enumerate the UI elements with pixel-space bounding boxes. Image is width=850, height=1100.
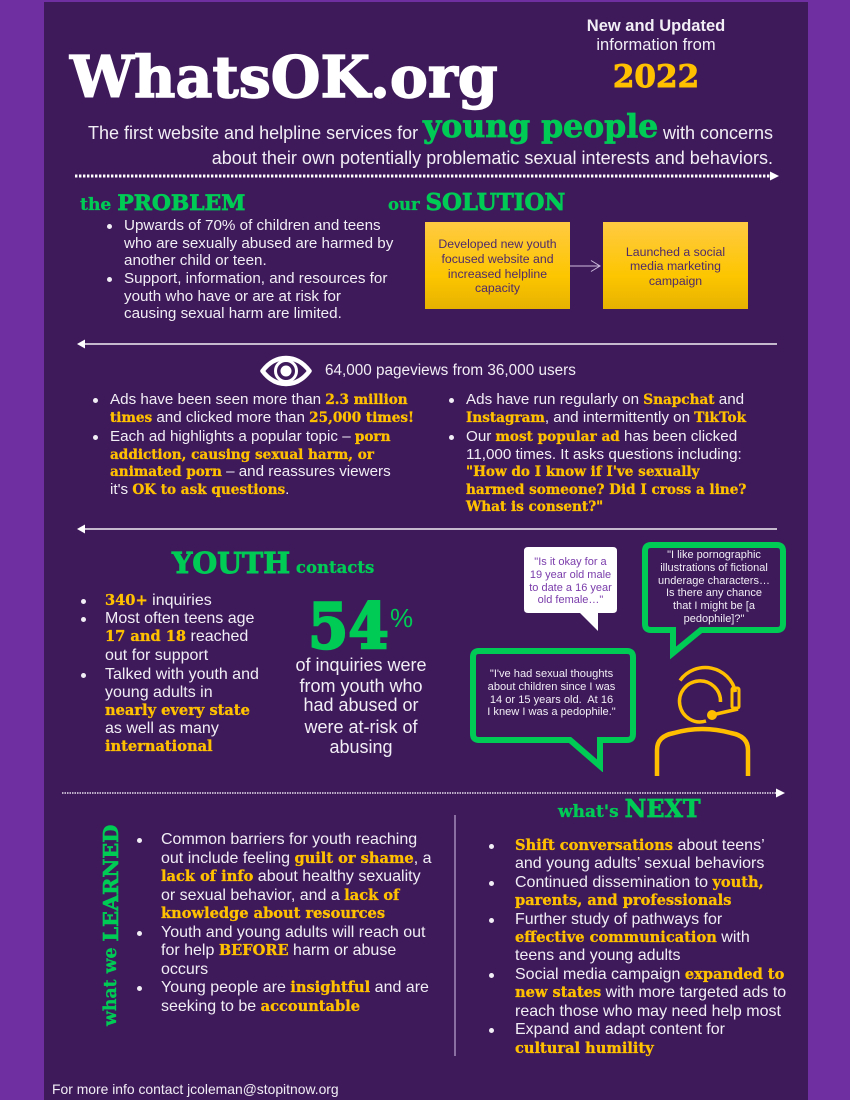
update note: information from [596, 36, 716, 54]
next bullets: teens and young adults [515, 947, 680, 964]
youth bullets: nearly every state [105, 702, 250, 719]
solution box: website: Developed new youth [438, 237, 557, 251]
ads results left column: it's OK to ask questions. [110, 481, 289, 498]
learned bullets: lack of info about healthy sexuality [161, 868, 421, 885]
divider arrow [77, 340, 777, 348]
learned bullets: seeking to be accountable [161, 998, 360, 1015]
ads results left column: times and clicked more than 25,000 times! [110, 409, 414, 426]
next bullets: Continued dissemination to youth, [515, 874, 764, 891]
update note [587, 17, 725, 95]
speech bubble: illustrations question: illustrations of fictional [660, 562, 768, 574]
learned bullets [137, 831, 432, 1015]
speech bubble: illustrations question [642, 542, 786, 660]
learned bullets: Common barriers for youth reaching [161, 831, 417, 848]
speech bubble: dating question: "Is it okay for a [534, 556, 607, 568]
learned bullets: out include feeling guilt or shame, a [161, 850, 431, 866]
pageviews stat [260, 356, 576, 386]
problem bullets [107, 217, 394, 322]
learned bullets: Young people are insightful and are [161, 979, 429, 996]
pageviews stat: 64,000 pageviews from 36,000 users [325, 362, 576, 379]
solution box: website [425, 222, 570, 309]
subtitle: The first website and helpline services for [88, 123, 418, 143]
youth bullets: 17 and 18 reached [105, 628, 248, 645]
ads results right column: Our most popular ad has been clicked [466, 428, 737, 445]
panel: youth contacts [81, 546, 427, 757]
icon: eye [260, 356, 312, 386]
subtitle: young people [423, 108, 658, 145]
ads results left column: animated porn – and reassures viewers [110, 463, 391, 480]
update note: New and Updated [587, 17, 725, 35]
youth bullets: out for support [105, 647, 208, 664]
ads results right column [449, 391, 746, 515]
title: WhatsOK.org [70, 44, 498, 111]
youth bullets: young adults in [105, 684, 213, 701]
ads results right column: Instagram, and intermittently on TikTok [466, 409, 746, 426]
problem bullets: Support, information, and resources for [124, 270, 387, 287]
next bullets: cultural humility [515, 1040, 654, 1057]
heading: our solution: our SOLUTION [388, 189, 565, 216]
solution box: website: increased helpline [448, 266, 547, 280]
solution box: website: capacity [475, 281, 520, 295]
stat: 54 percent [295, 589, 427, 757]
youth bullets: Most often teens age [105, 610, 254, 627]
youth bullets: 340+ inquiries [105, 592, 212, 609]
next bullets: effective communication with [515, 929, 750, 946]
divider: vertical [454, 815, 456, 1056]
youth bullets: Talked with youth and [105, 666, 259, 683]
youth bullets [81, 592, 259, 755]
divider arrow [77, 524, 777, 534]
ads results right column: 11,000 times. It asks questions including: [466, 446, 742, 462]
subtitle: with concerns [663, 123, 773, 143]
subtitle: about their own potentially problematic sexual interests and behaviors. [212, 148, 773, 168]
heading: youth contacts: YOUTH contacts [172, 546, 374, 580]
speech bubble: illustrations question: Is there any chance [666, 587, 762, 599]
footer contact: For more info contact jcoleman@stopitnow.org [52, 1081, 339, 1097]
next bullets: Social media campaign expanded to [515, 966, 784, 983]
heading: what we learned: what we LEARNED [98, 825, 123, 1026]
speech bubble: illustrations question: that I might be [a [673, 600, 755, 612]
next bullets: new states with more targeted ads to [515, 984, 786, 1001]
ads results left column: Each ad highlights a popular topic – porn [110, 428, 390, 445]
stat: 54 percent: had abused or [303, 695, 419, 715]
next bullets: and young adults’ sexual behaviors [515, 855, 764, 872]
speech bubble: illustrations question: "I like pornographic [667, 549, 761, 561]
youth bullets: as well as many [105, 720, 219, 737]
next bullets: parents, and professionals [515, 892, 731, 909]
speech bubble: dating question: to date a 16 year [529, 582, 612, 594]
solution box: campaign [603, 222, 748, 309]
youth bullets: international [105, 738, 213, 755]
solution box: campaign: campaign [649, 274, 702, 288]
stat: 54 percent: abusing [329, 737, 393, 757]
next bullets: Expand and adapt content for [515, 1021, 725, 1038]
solution box: campaign: Launched a social [626, 245, 725, 259]
panel: the problem [80, 191, 394, 322]
subtitle [88, 108, 773, 168]
stat: 54 percent: were at-risk of [304, 717, 418, 737]
next bullets [489, 837, 786, 1057]
solution box: website: focused website and [441, 252, 554, 266]
heading: the problem: the PROBLEM [80, 191, 245, 216]
next bullets: Shift conversations about teens’ [515, 837, 765, 854]
stat: 54 percent: 54 [308, 589, 389, 663]
panel: our solution [388, 189, 748, 309]
speech bubble: thoughts disclosure: "I've had sexual thoughts about children since I was 14 or 15 years old. At 16 I knew I was a pedophile." [487, 668, 616, 718]
next bullets: Further study of pathways for [515, 911, 722, 928]
speech bubble: dating question: 19 year old male [530, 569, 611, 581]
problem bullets: who are sexually abused are harmed by [124, 234, 393, 252]
stat: 54 percent: % [390, 603, 413, 633]
dotted divider arrow [62, 788, 785, 798]
speech bubble: thoughts disclosure [470, 648, 636, 772]
ads results right column: What is consent?" [466, 499, 603, 515]
speech bubble: illustrations question: pedophile]?" [684, 613, 744, 625]
ads results left column: Ads have been seen more than 2.3 million [110, 391, 408, 408]
problem bullets: Upwards of 70% of children and teens [124, 217, 381, 234]
learned bullets: for help BEFORE harm or abuse [161, 942, 396, 959]
ads results left column [93, 391, 414, 498]
solution box: campaign: media marketing [630, 259, 721, 273]
speech bubble: dating question: old female…" [538, 594, 603, 606]
ads results right column: harmed someone? Did I cross a line? [466, 482, 746, 498]
learned bullets: Youth and young adults will reach out [161, 924, 425, 941]
problem bullets: causing sexual harm are limited. [124, 305, 342, 322]
ads results left column: addiction, causing sexual harm, or [110, 446, 374, 462]
stat: 54 percent: of inquiries were [295, 655, 427, 675]
learned bullets: occurs [161, 961, 208, 978]
stat: 54 percent: from youth who [299, 676, 423, 696]
icon: helpline operator with headset [654, 666, 750, 776]
panel: what's next [489, 795, 786, 1057]
speech bubble: dating question [524, 547, 617, 631]
speech bubble: illustrations question: underage characters… [658, 575, 770, 587]
problem bullets: youth who have or are at risk for [124, 288, 341, 304]
ads results right column: Ads have run regularly on Snapchat and [466, 391, 744, 408]
problem bullets: another child or teen. [124, 252, 267, 269]
heading: what's next: what's NEXT [558, 795, 701, 823]
panel: what we learned [98, 825, 432, 1026]
learned bullets: or sexual behavior, and a lack of [161, 886, 399, 904]
learned bullets: knowledge about resources [161, 905, 385, 922]
arrow between boxes [570, 260, 601, 272]
dotted arrow [75, 172, 779, 180]
update note: 2022 [613, 59, 699, 95]
ads results right column: "How do I know if I've sexually [466, 464, 700, 480]
next bullets: reach those who may need help most [515, 1003, 781, 1020]
